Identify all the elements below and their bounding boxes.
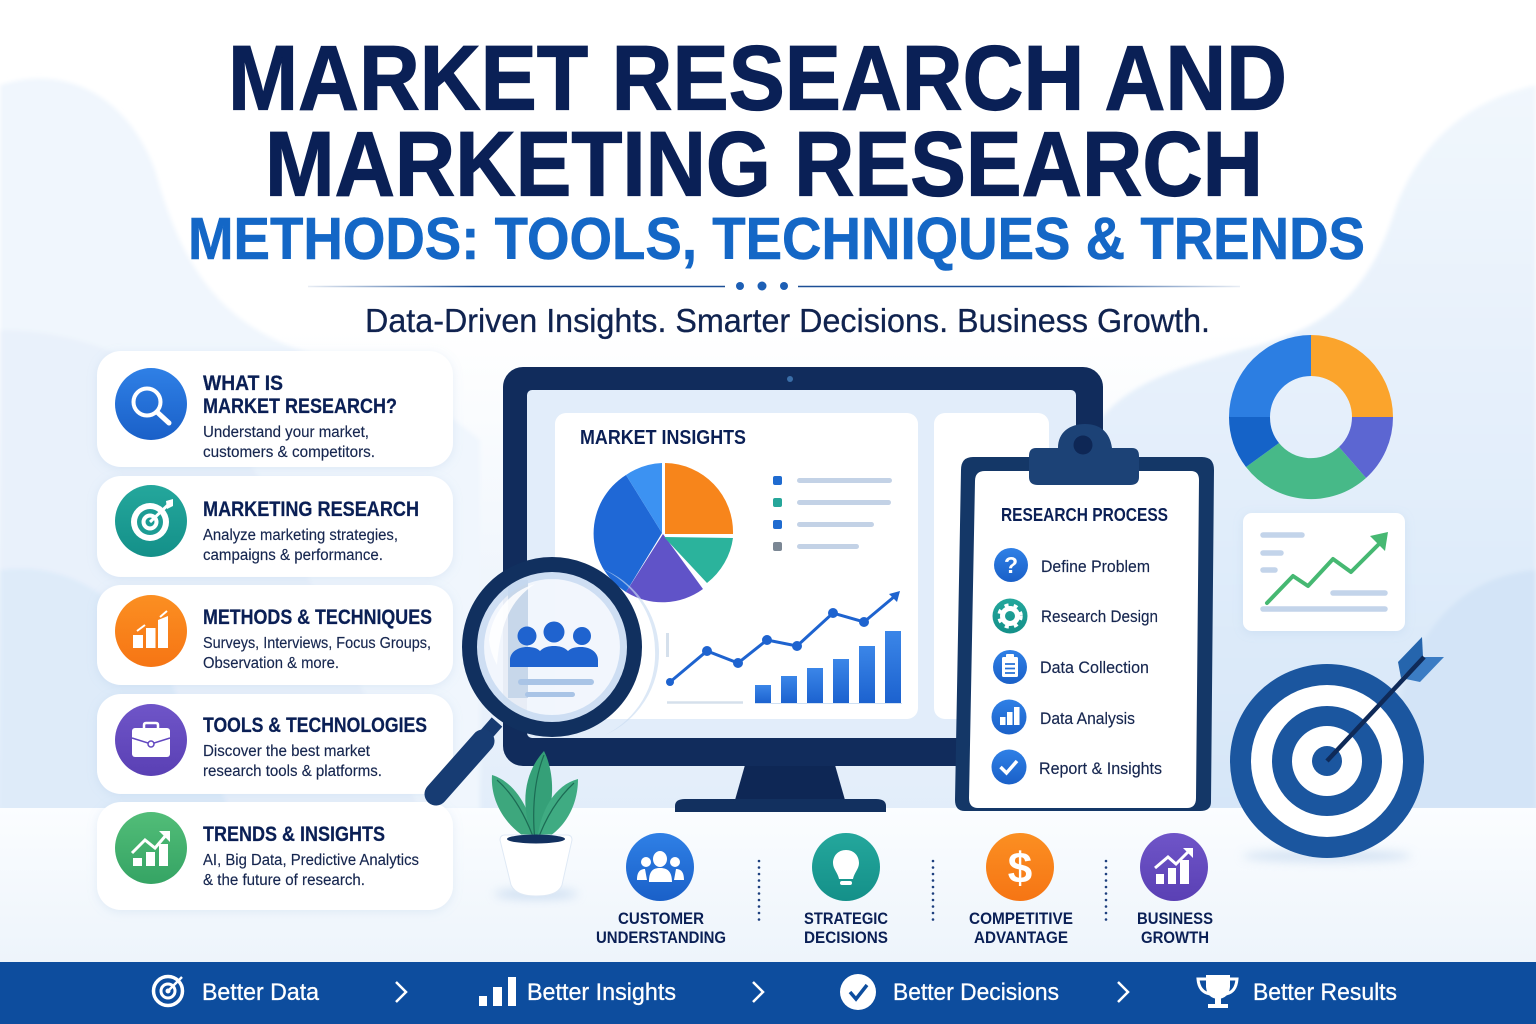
icon: people group [510, 622, 598, 667]
footer bar [0, 962, 1536, 1024]
arrow [753, 982, 763, 1002]
legend [773, 476, 892, 551]
panel: what is market research [97, 351, 453, 467]
description: Surveys, Interviews, Focus Groups, [203, 635, 431, 652]
panel: methods and techniques [97, 585, 453, 685]
line and bar chart [666, 591, 902, 704]
footer bar: Better Insights [527, 979, 676, 1006]
description [203, 424, 375, 461]
description: Understand your market, [203, 424, 369, 441]
description [203, 527, 398, 564]
step: research design [992, 598, 1158, 634]
description [203, 743, 382, 780]
title: MARKET RESEARCH AND [228, 28, 1287, 130]
title [228, 28, 1287, 216]
icon: check [840, 974, 876, 1010]
divider with dots [308, 282, 1240, 290]
tagline: Data-Driven Insights. Smarter Decisions. Business Growth. [365, 302, 1210, 339]
icon: briefcase [115, 704, 187, 776]
step: data collection: Data Collection [1040, 659, 1149, 677]
benefit: strategic decisions [804, 833, 888, 947]
description: campaigns & performance. [203, 547, 383, 564]
benefit: business growth [1137, 833, 1213, 947]
arrow [396, 982, 406, 1002]
step: data analysis: Data Analysis [1040, 710, 1135, 728]
panel: trends and insights [97, 802, 453, 910]
benefit: business growth: GROWTH [1141, 928, 1209, 947]
step: research design: Research Design [1041, 608, 1158, 626]
footer bar: Better Results [1253, 979, 1397, 1006]
description: research tools & platforms. [203, 763, 382, 780]
leaves [492, 751, 578, 842]
description [203, 852, 419, 889]
description: & the future of research. [203, 872, 365, 889]
target with arrow [1230, 637, 1444, 862]
step: define problem: Define Problem [1041, 558, 1150, 576]
clipboard: research process: RESEARCH PROCESS [1001, 505, 1168, 525]
description: Discover the best market [203, 743, 371, 760]
description [203, 635, 431, 672]
plant [492, 751, 578, 899]
icon: bars [479, 977, 516, 1006]
step: report and insights [992, 750, 1162, 784]
growth line card [1243, 513, 1405, 631]
icon: magnifier [115, 368, 187, 440]
icon: growth chart [115, 812, 187, 884]
heading: METHODS & TECHNIQUES [203, 606, 432, 629]
panel: market insights: MARKET INSIGHTS [580, 427, 746, 449]
icon: target [154, 976, 182, 1006]
clip [1029, 424, 1139, 485]
heading [203, 372, 397, 418]
description: Analyze marketing strategies, [203, 527, 398, 544]
panel: marketing research [97, 476, 453, 577]
step: define problem [994, 548, 1150, 582]
description: AI, Big Data, Predictive Analytics [203, 852, 419, 869]
donut chart [1229, 335, 1393, 499]
benefit: customer understanding [596, 833, 726, 947]
step: data analysis [992, 700, 1135, 734]
benefit: strategic decisions: DECISIONS [804, 928, 888, 947]
magnifying glass [436, 564, 659, 794]
benefit: competitive advantage: $ [1008, 844, 1032, 893]
subtitle: METHODS: TOOLS, TECHNIQUES & TRENDS [188, 206, 1365, 272]
heading: WHAT IS [203, 372, 283, 395]
icon: trophy [1198, 975, 1237, 1008]
footer bar: Better Data [202, 979, 320, 1006]
monitor [503, 367, 1103, 812]
heading: TRENDS & INSIGHTS [203, 823, 385, 846]
heading: MARKETING RESEARCH [203, 498, 419, 521]
step: report and insights: Report & Insights [1039, 760, 1162, 778]
icon: bar chart [115, 595, 187, 667]
step: define problem: ? [1004, 552, 1018, 578]
pie chart [594, 463, 733, 602]
panel: tools and technologies [97, 694, 453, 794]
benefit: competitive advantage [969, 833, 1073, 947]
benefit: customer understanding: UNDERSTANDING [596, 928, 726, 947]
benefit: competitive advantage: COMPETITIVE [969, 909, 1073, 928]
benefit: competitive advantage: ADVANTAGE [974, 928, 1068, 947]
arrow [1118, 982, 1128, 1002]
description: Observation & more. [203, 655, 339, 672]
pot [500, 835, 572, 896]
description: customers & competitors. [203, 444, 375, 461]
panel: market insights [555, 413, 1049, 719]
footer bar: Better Decisions [893, 979, 1059, 1006]
benefit: business growth: BUSINESS [1137, 909, 1213, 928]
benefit: customer understanding: CUSTOMER [618, 909, 704, 928]
heading: MARKET RESEARCH? [203, 395, 397, 418]
title: MARKETING RESEARCH [265, 114, 1263, 216]
icon: target [115, 485, 187, 557]
heading: TOOLS & TECHNOLOGIES [203, 714, 427, 737]
clipboard: research process [955, 424, 1214, 811]
step: data collection [993, 650, 1149, 684]
benefit: strategic decisions: STRATEGIC [804, 909, 888, 928]
